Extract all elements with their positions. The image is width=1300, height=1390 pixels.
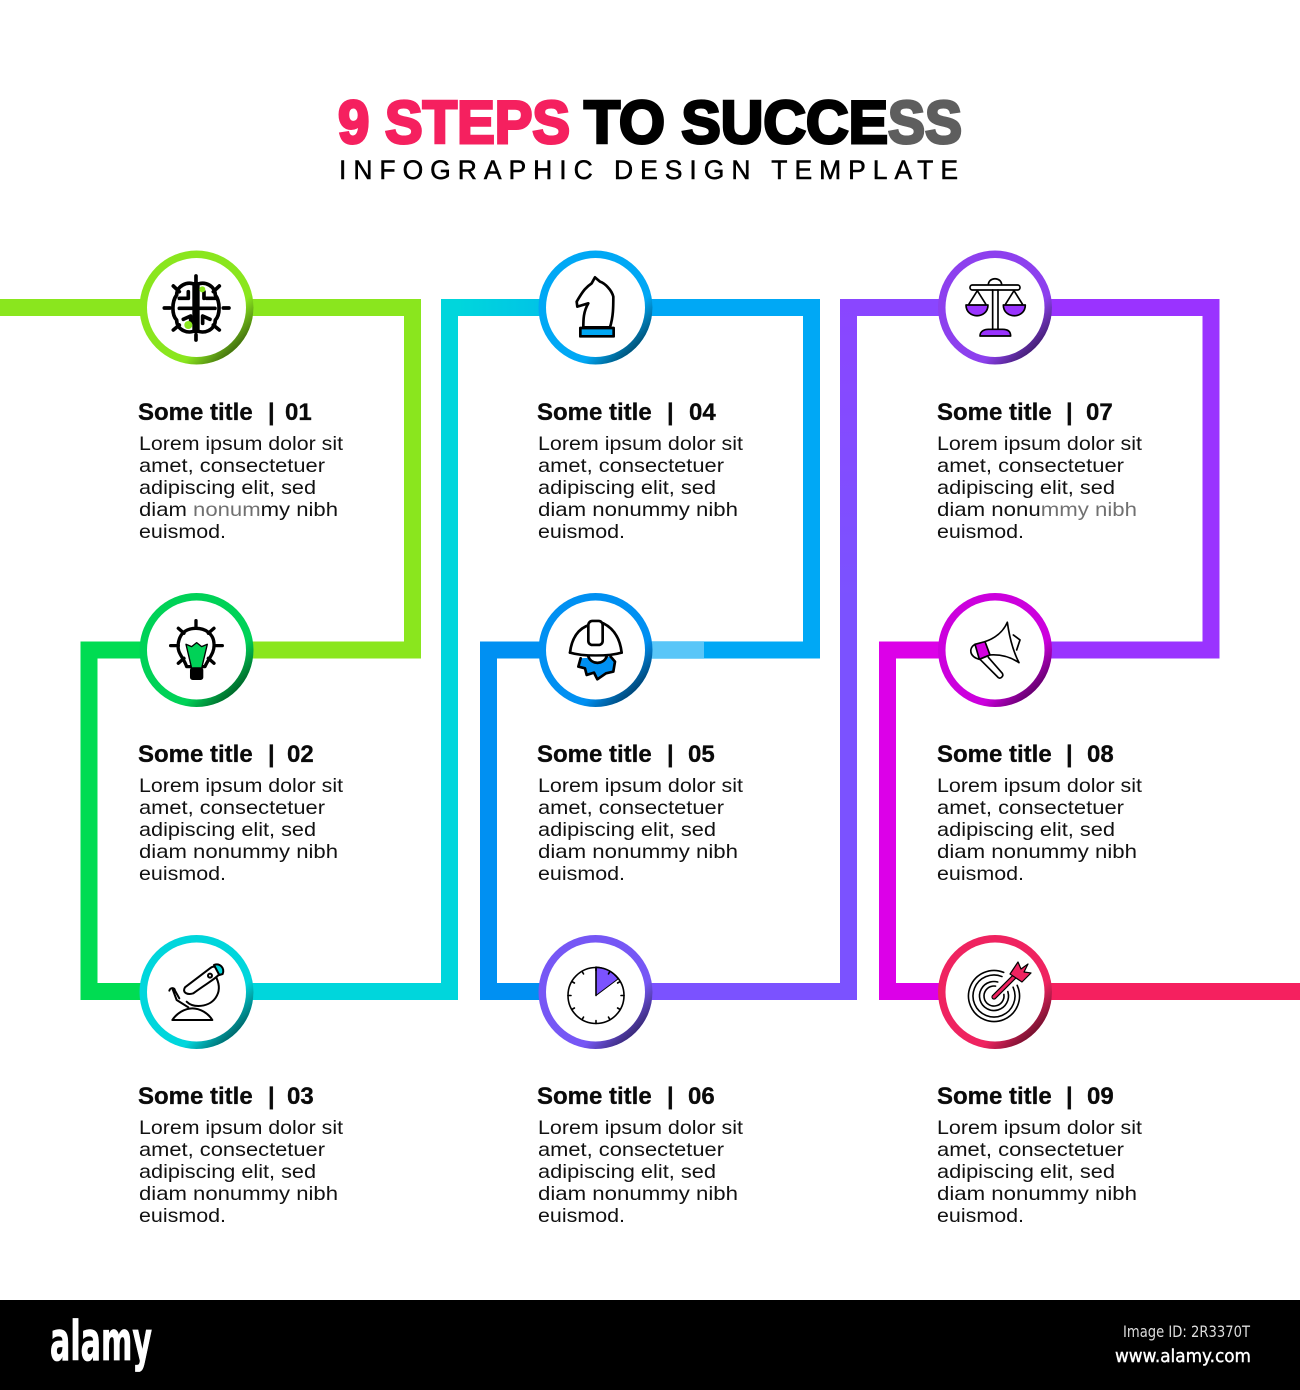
body 07: diam nonummy nibh [937,499,1137,521]
body 06: amet, consectetuer [538,1139,725,1161]
step 06 [537,935,744,1227]
icon: brain [164,276,229,340]
heading 04: | [667,399,674,426]
heading 05: | [667,741,674,768]
heading 05: 05 [688,741,715,768]
body 09 [937,1117,1143,1227]
heading 02: 02 [287,741,314,768]
subtitle: INFOGRAPHIC DESIGN TEMPLATE [339,155,958,185]
step 07 [937,250,1143,543]
badge 03 [140,935,254,1049]
website: www.alamy.com [1115,1346,1251,1367]
step 02 [138,593,344,885]
body 06: adipiscing elit, sed [538,1161,716,1183]
badge 02 [140,593,254,707]
body 04: diam nonummy nibh [538,499,738,521]
heading 06: Some title [537,1083,652,1110]
body 07: adipiscing elit, sed [937,477,1115,499]
body 07 [937,433,1143,543]
body 02: diam nonummy nibh [139,841,338,863]
heading 04: Some title [537,399,652,426]
body 08: amet, consectetuer [937,797,1125,819]
body 07: amet, consectetuer [937,455,1125,477]
icon: megaphone [971,622,1020,678]
heading 06: 06 [688,1083,715,1110]
body 06: diam nonummy nibh [538,1183,738,1205]
badge 09 [938,935,1052,1049]
badge 04 [538,250,652,364]
body 04: Lorem ipsum dolor sit [538,433,744,455]
body 08: Lorem ipsum dolor sit [937,775,1143,797]
body 02: adipiscing elit, sed [139,819,316,841]
icon: clock [568,967,624,1024]
body 08: adipiscing elit, sed [937,819,1115,841]
icon: hard hat with gear [570,621,622,679]
body 02: amet, consectetuer [139,797,326,819]
badge 01 [140,250,254,364]
icon: light bulb [171,621,222,680]
heading 08: | [1066,741,1073,768]
step 08 [937,593,1143,885]
body 05: amet, consectetuer [538,797,725,819]
heading 06: | [667,1083,674,1110]
heading 08: Some title [937,741,1052,768]
badge 07 [938,250,1052,364]
icon: chess knight [577,277,614,336]
badge 06 [538,935,652,1049]
body 09: diam nonummy nibh [937,1183,1137,1205]
heading 03: 03 [287,1083,314,1110]
image id: Image ID: 2R3370T [1123,1322,1250,1341]
connector path [0,308,1300,992]
badge 08 [938,593,1052,707]
heading 02: | [268,741,275,768]
icon: balance scale [966,279,1025,336]
body 04: euismod. [538,521,625,543]
heading 09: Some title [937,1083,1052,1110]
body 01: euismod. [139,521,226,543]
body 09: Lorem ipsum dolor sit [937,1117,1143,1139]
heading 09: | [1066,1083,1073,1110]
body 06 [538,1117,744,1227]
icon: target with arrow [961,962,1031,1029]
heading 01: Some title [138,399,253,426]
body 03 [139,1117,344,1227]
body 01: Lorem ipsum dolor sit [139,433,344,455]
body 08: diam nonummy nibh [937,841,1137,863]
body 08 [937,775,1143,885]
title: 9 STEPS [338,89,570,156]
title [338,89,962,156]
body 05: diam nonummy nibh [538,841,738,863]
heading 02: Some title [138,741,253,768]
body 03: euismod. [139,1205,226,1227]
body 03: amet, consectetuer [139,1139,326,1161]
body 07: euismod. [937,521,1024,543]
heading 01: | [268,399,275,426]
heading 03: Some title [138,1083,253,1110]
body 09: amet, consectetuer [937,1139,1125,1161]
body 03: Lorem ipsum dolor sit [139,1117,344,1139]
icon: microscope [169,964,223,1020]
step 03 [138,935,344,1227]
body 05: adipiscing elit, sed [538,819,716,841]
step 04 [537,250,744,543]
body 04: adipiscing elit, sed [538,477,716,499]
body 05: euismod. [538,863,625,885]
body 06: Lorem ipsum dolor sit [538,1117,744,1139]
body 07: Lorem ipsum dolor sit [937,433,1143,455]
body 01 [139,433,344,543]
body 01: diam nonummy nibh [139,499,338,521]
body 02 [139,775,344,885]
step 09 [937,935,1143,1227]
heading 08: 08 [1087,741,1114,768]
heading 07: 07 [1086,399,1113,426]
heading 09: 09 [1087,1083,1114,1110]
body 02: Lorem ipsum dolor sit [139,775,344,797]
step 01 [138,250,344,543]
footer logo: alamy [50,1310,152,1373]
body 02: euismod. [139,863,226,885]
body 04 [538,433,744,543]
heading 04: 04 [689,399,716,426]
heading 01: 01 [285,399,312,426]
body 09: adipiscing elit, sed [937,1161,1115,1183]
step 05 [537,593,744,885]
body 04: amet, consectetuer [538,455,725,477]
title: SS [888,89,962,156]
body 03: adipiscing elit, sed [139,1161,316,1183]
body 05: Lorem ipsum dolor sit [538,775,744,797]
title: TO SUCCE [584,89,888,156]
heading 07: | [1066,399,1073,426]
body 01: amet, consectetuer [139,455,326,477]
body 03: diam nonummy nibh [139,1183,338,1205]
heading 05: Some title [537,741,652,768]
badge 05 [538,593,652,707]
heading 07: Some title [937,399,1052,426]
body 01: adipiscing elit, sed [139,477,316,499]
body 08: euismod. [937,863,1024,885]
body 09: euismod. [937,1205,1024,1227]
footer bar [0,1300,1300,1390]
body 06: euismod. [538,1205,625,1227]
body 05 [538,775,744,885]
heading 03: | [268,1083,275,1110]
